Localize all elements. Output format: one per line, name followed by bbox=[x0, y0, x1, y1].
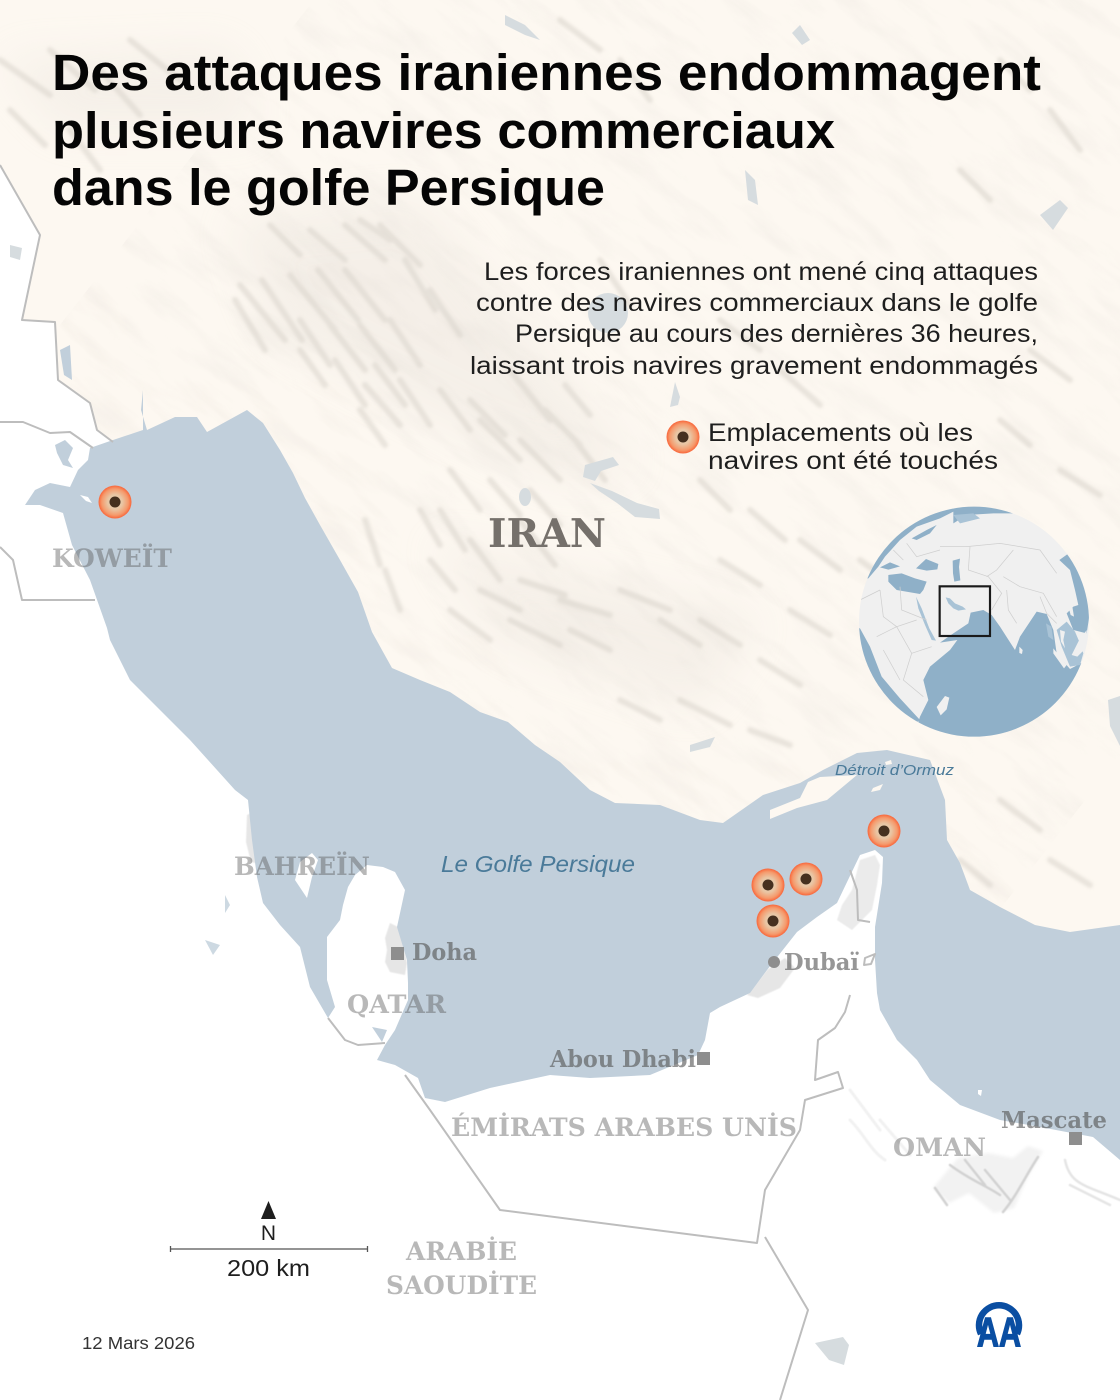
attack markers bbox=[98, 486, 900, 938]
intro text: laissant trois navires gravement endommagés bbox=[470, 352, 1038, 380]
country and city labels: ARABİE bbox=[405, 1237, 517, 1266]
sea: Persian Gulf and Gulf of Oman bbox=[25, 390, 1120, 1160]
logo: AA: AA bbox=[977, 1309, 1021, 1355]
date: 12 Mars 2026 bbox=[82, 1333, 195, 1353]
intro text: Les forces iraniennes ont mené cinq attaques bbox=[484, 258, 1038, 286]
title: dans le golfe Persique bbox=[52, 159, 605, 216]
Black Sea bbox=[916, 559, 938, 571]
intro text: Persique au cours des dernières 36 heures, bbox=[515, 320, 1038, 348]
water labels bbox=[441, 762, 955, 877]
intro text: contre des navires commerciaux dans le golfe bbox=[476, 289, 1038, 317]
Pacific rim bbox=[1060, 554, 1089, 634]
country and city labels: BAHREÏN bbox=[234, 852, 370, 881]
country and city labels: Dubaï bbox=[784, 949, 859, 976]
legend text bbox=[708, 419, 998, 475]
Atlantic bbox=[859, 628, 920, 722]
country and city labels: SAOUDİTE bbox=[386, 1271, 537, 1300]
Mediterranean bbox=[880, 562, 900, 570]
country and city labels: IRAN bbox=[488, 511, 606, 557]
legend text: Emplacements où les bbox=[708, 419, 973, 447]
terrain relief: Iran bbox=[0, 17, 1104, 890]
scale bar and north arrow bbox=[170, 1201, 368, 1281]
country and city labels: KOWEÏT bbox=[52, 544, 172, 573]
legend marker bbox=[666, 420, 700, 454]
terrain relief: Arabia and Oman bbox=[850, 1090, 1120, 1213]
inset box bbox=[940, 586, 990, 636]
urban areas bbox=[246, 810, 880, 998]
city markers bbox=[391, 947, 1082, 1145]
north arrow bbox=[261, 1201, 276, 1245]
north arrow: N bbox=[261, 1222, 276, 1245]
water labels: Détroit d’Ormuz bbox=[835, 762, 955, 779]
title: Des attaques iraniennes endommagent bbox=[52, 44, 1041, 101]
country and city labels: Doha bbox=[412, 939, 477, 966]
water labels: Le Golfe Persique bbox=[441, 851, 635, 877]
country and city labels: Mascate bbox=[1001, 1107, 1107, 1134]
lighter seas bbox=[916, 513, 1083, 667]
locator globe bbox=[853, 500, 1093, 743]
scale line bbox=[170, 1246, 368, 1252]
country and city labels: QATAR bbox=[347, 990, 446, 1019]
Caspian Sea bbox=[953, 559, 960, 582]
legend text: navires ont été touchés bbox=[708, 447, 998, 475]
scale text: 200 km bbox=[227, 1255, 310, 1281]
Atlantic north rim and Baltic bbox=[868, 508, 954, 578]
country and city labels: OMAN bbox=[893, 1133, 986, 1162]
title: plusieurs navires commerciaux bbox=[52, 102, 835, 159]
title bbox=[52, 44, 1041, 216]
Indian Ocean bbox=[918, 610, 1082, 737]
country borders bbox=[0, 165, 875, 1400]
intro text bbox=[470, 258, 1038, 380]
country and city labels bbox=[52, 511, 1107, 1300]
country and city labels: ÉMİRATS ARABES UNİS bbox=[451, 1113, 797, 1142]
country and city labels: Abou Dhabi bbox=[549, 1046, 696, 1073]
legend bbox=[666, 419, 998, 475]
